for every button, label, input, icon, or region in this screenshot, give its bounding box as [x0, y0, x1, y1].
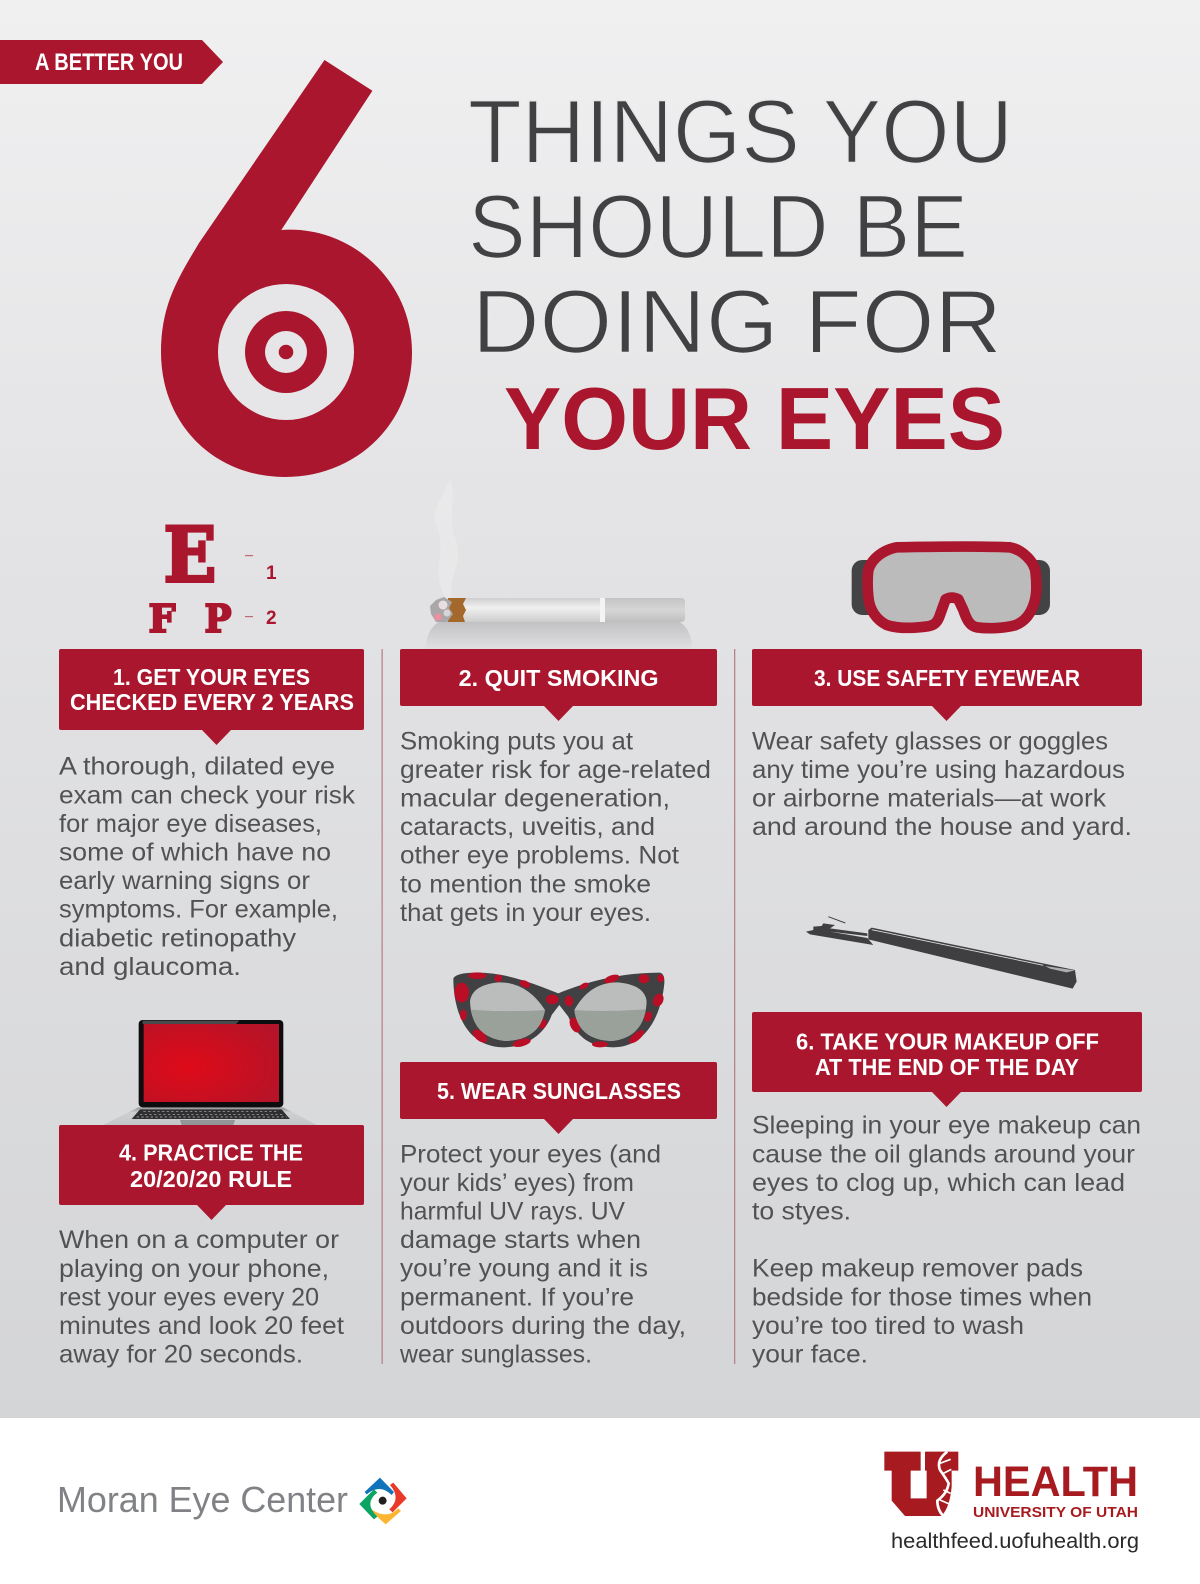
text: step 6 body: bedside for those times when	[752, 1283, 1092, 1311]
text: step 5 body: permanent. If you’re	[400, 1283, 634, 1311]
text: step 4 body: minutes and look 20 feet	[59, 1312, 344, 1340]
text: step 4 body: When on a computer or	[59, 1226, 339, 1254]
tag: a better you: A BETTER YOU	[35, 49, 183, 76]
title: THINGS YOU	[468, 82, 1013, 182]
text: step 5 body: you’re young and it is	[400, 1255, 648, 1283]
text: step 4 body	[59, 1226, 344, 1369]
title	[468, 82, 1013, 468]
heading: step 3: 3. USE SAFETY EYEWEAR	[814, 665, 1080, 691]
heading: step 6: AT THE END OF THE DAY	[815, 1054, 1079, 1080]
text: step 1 body: for major eye diseases,	[59, 810, 322, 838]
tag: a better you	[0, 40, 223, 84]
icon: eye chart: 2	[266, 608, 277, 629]
icon: eyeliner pencil	[806, 917, 1077, 989]
icon: eye chart: 1	[266, 563, 277, 584]
heading: step 2	[400, 649, 717, 721]
panel: step 2	[400, 649, 717, 927]
heading: step 3	[752, 649, 1142, 721]
text: step 4 body: rest your eyes every 20	[59, 1283, 319, 1311]
text: step 2 body: Smoking puts you at	[400, 727, 633, 755]
text: step 3 body: Wear safety glasses or goggles	[752, 727, 1108, 755]
title: YOUR EYES	[504, 369, 1005, 468]
text: step 1 body: symptoms. For example,	[59, 896, 338, 924]
panel: step 3	[752, 649, 1142, 841]
heading: step 4: 20/20/20 RULE	[130, 1166, 292, 1192]
icon: laptop	[103, 1020, 317, 1125]
text: step 1 body: some of which have no	[59, 838, 331, 866]
panel: step 4	[59, 1125, 364, 1369]
divider left	[382, 649, 383, 1364]
text: step 3 body: or airborne materials—at work	[752, 784, 1107, 812]
icon: eye chart: P	[204, 596, 232, 641]
text: step 5 body: harmful UV rays. UV	[400, 1198, 625, 1226]
heading: step 1: CHECKED EVERY 2 YEARS	[70, 689, 354, 715]
text: step 6 body: you’re too tired to wash	[752, 1312, 1024, 1340]
text: step 1 body: A thorough, dilated eye	[59, 753, 335, 781]
text: step 3 body: any time you’re using hazardous	[752, 756, 1125, 784]
logo: University of Utah Health	[884, 1452, 1138, 1521]
heading: step 5: 5. WEAR SUNGLASSES	[437, 1078, 681, 1104]
icon: block U with DNA	[884, 1452, 958, 1516]
text: step 5 body: outdoors during the day,	[400, 1312, 686, 1340]
text: step 1 body: and glaucoma.	[59, 953, 241, 981]
heading: step 6: 6. TAKE YOUR MAKEUP OFF	[796, 1028, 1099, 1054]
text: step 5 body	[399, 1140, 686, 1368]
text: step 2 body: other eye problems. Not	[400, 842, 679, 870]
text: step 3 body: and around the house and yard.	[752, 813, 1132, 841]
text: step 2 body	[400, 727, 711, 927]
text: step 5 body: wear sunglasses.	[399, 1340, 592, 1368]
text: step 6 body: Sleeping in your eye makeup can	[752, 1112, 1141, 1140]
text: step 3 body	[752, 727, 1132, 841]
icon: sunglasses	[453, 972, 666, 1049]
text: step 6 body: cause the oil glands around your	[752, 1140, 1135, 1168]
icon: eye chart: E	[164, 510, 216, 600]
text: step 2 body: macular degeneration,	[400, 784, 670, 812]
text: step 4 body: away for 20 seconds.	[59, 1341, 303, 1369]
icon: cigarette	[426, 478, 692, 649]
title: SHOULD BE	[468, 178, 968, 278]
text: step 2 body: cataracts, uveitis, and	[400, 813, 655, 841]
panel: step 1	[59, 649, 364, 981]
text: step 6 body	[752, 1112, 1141, 1368]
heading: step 1: 1. GET YOUR EYES	[113, 664, 310, 690]
panel: step 5	[399, 1062, 717, 1368]
panel: step 6	[752, 1012, 1142, 1368]
divider right	[734, 649, 735, 1364]
heading: step 1	[59, 649, 364, 745]
heading: step 4: 4. PRACTICE THE	[119, 1140, 303, 1166]
icon: eye chart: F	[148, 596, 176, 641]
heading: step 6	[752, 1012, 1142, 1107]
text: step 6 body: to styes.	[752, 1198, 851, 1226]
text: step 2 body: to mention the smoke	[400, 870, 651, 898]
big number 6 with target eye	[161, 60, 412, 477]
text: step 6 body: Keep makeup remover pads	[752, 1255, 1083, 1283]
logo: Moran Eye Center: Moran Eye Center	[57, 1479, 348, 1520]
logo: University of Utah Health: HEALTH	[973, 1458, 1138, 1506]
text: step 5 body: your kids’ eyes) from	[400, 1169, 634, 1197]
heading: step 4	[59, 1125, 364, 1220]
text: step 6 body: eyes to clog up, which can lead	[752, 1169, 1125, 1197]
text: step 5 body: damage starts when	[400, 1226, 641, 1254]
text: step 2 body: that gets in your eyes.	[400, 899, 651, 927]
text: step 5 body: Protect your eyes (and	[400, 1140, 661, 1168]
icon: eye chart	[148, 510, 277, 641]
title: DOING FOR	[472, 272, 1002, 372]
logo: University of Utah Health: UNIVERSITY OF UTAH	[973, 1504, 1138, 1521]
text: step 1 body	[59, 753, 356, 981]
heading: step 2: 2. QUIT SMOKING	[459, 665, 659, 691]
website url: healthfeed.uofuhealth.org	[891, 1530, 1139, 1553]
text: step 1 body: diabetic retinopathy	[59, 924, 297, 952]
text: step 1 body: early warning signs or	[59, 867, 310, 895]
text: step 2 body: greater risk for age-related	[400, 756, 711, 784]
text: step 6 body: your face.	[752, 1340, 868, 1368]
heading: step 5	[400, 1062, 717, 1134]
footer panel	[0, 1418, 1200, 1584]
text: step 1 body: exam can check your risk	[59, 781, 356, 809]
icon: safety goggles	[852, 547, 1050, 628]
icon: Moran eye mark	[359, 1478, 407, 1524]
text: step 4 body: playing on your phone,	[59, 1255, 329, 1283]
